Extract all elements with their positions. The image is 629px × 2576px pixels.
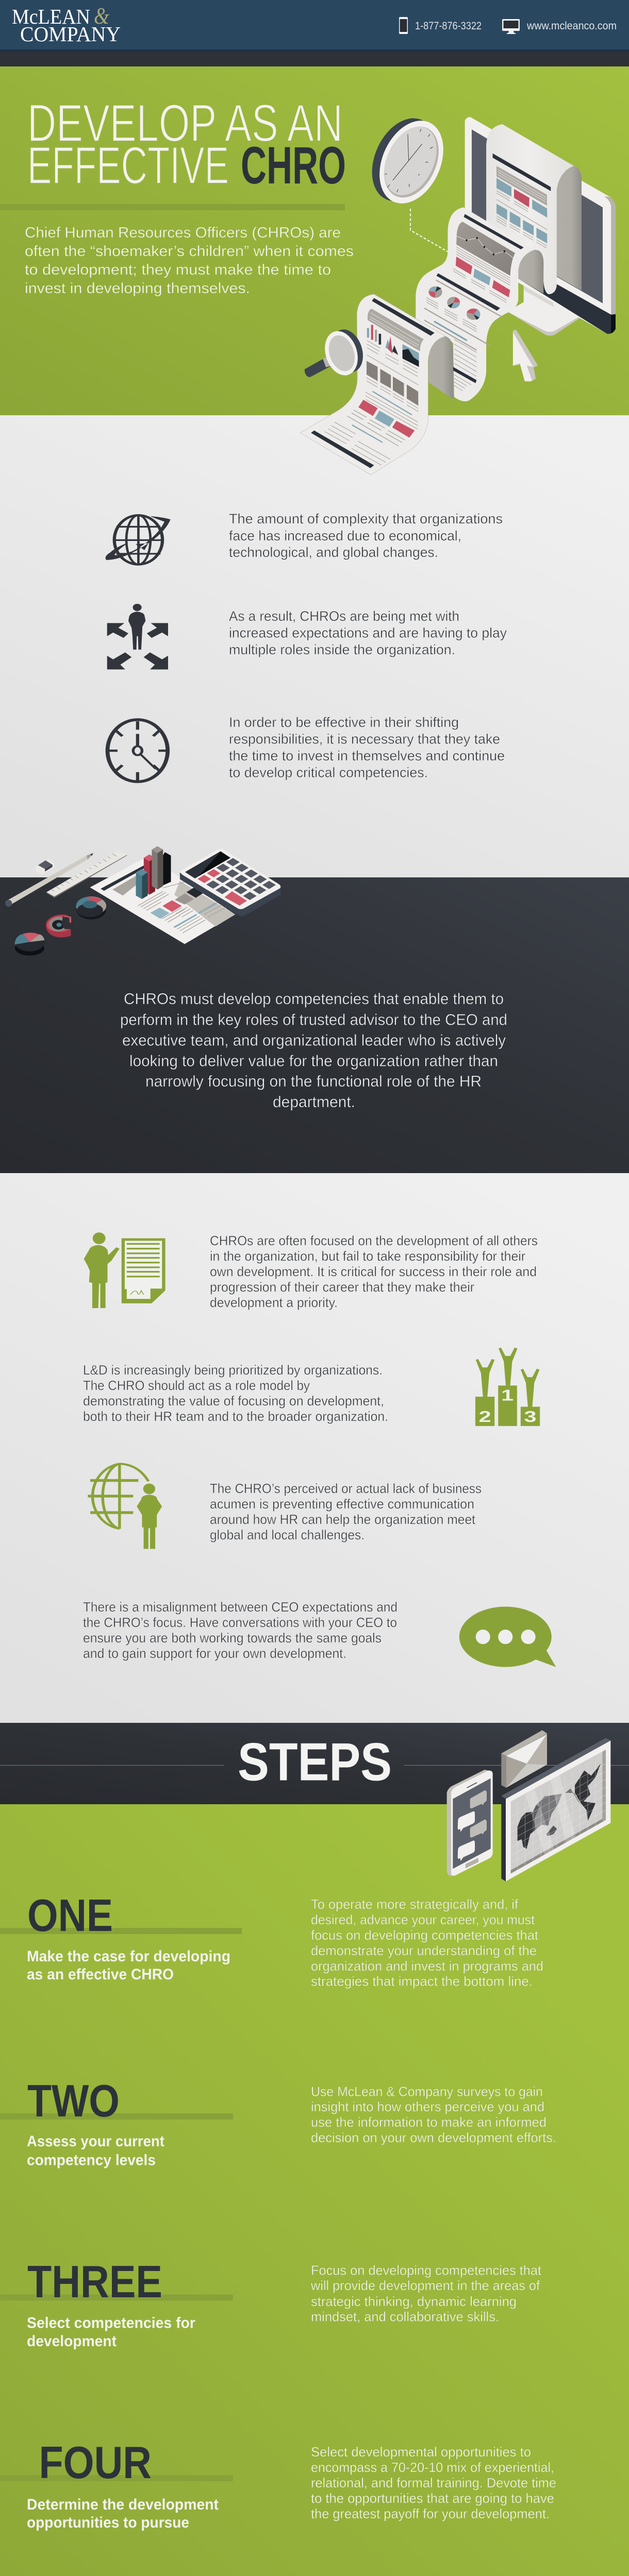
text: expectations [229, 608, 507, 657]
panel: steps banner [0, 1723, 629, 1804]
text: competencies statement: executive team, and organizational leader who is actively [122, 1031, 506, 1049]
step three description [310, 2263, 542, 2325]
text: investing time: to develop critical competencies. [229, 765, 428, 780]
text: own development: progression of their career that they make their [210, 1279, 474, 1295]
illustration: computer, scrolling report, clock, magnifier [300, 105, 616, 475]
step one heading [27, 1948, 230, 1983]
panel: challenges [83, 1232, 556, 1667]
illustration: desk with report, calculator, pencil and charts [5, 846, 281, 956]
panel: challenges background [0, 1173, 629, 1723]
step two description: decision on your own development efforts. [311, 2130, 556, 2145]
text: competencies statement: department. [273, 1093, 355, 1111]
title rule [0, 204, 345, 210]
text: CEO misalignment [83, 1599, 398, 1661]
framed world map [501, 1738, 610, 1882]
step two heading: competency levels [27, 2151, 156, 2169]
pie charts on page two [428, 286, 480, 320]
text: business acumen: around how HR can help the organization meet [210, 1512, 476, 1527]
text: own development: own development. It is critical for success in their role and [210, 1264, 537, 1279]
step four description: Select developmental opportunities to [311, 2444, 531, 2460]
paper sheet: page one curl [557, 166, 582, 291]
step three description: Focus on developing competencies that [311, 2263, 542, 2278]
title: CHRO [241, 136, 346, 195]
step one description: strategies that impact the bottom line. [311, 1973, 533, 1989]
step four heading: opportunities to pursue [27, 2514, 189, 2531]
icon: person with four arrows [107, 604, 168, 669]
text: investing time [229, 715, 505, 780]
step one [0, 1890, 543, 1989]
step two number: TWO [27, 2075, 120, 2126]
text: CEO misalignment: ensure you are both working towards the same goals [83, 1630, 382, 1646]
text: competencies statement: narrowly focusing on the functional role of the HR [145, 1072, 482, 1090]
step two rule [0, 2113, 233, 2120]
step four [0, 2437, 556, 2531]
icon: winners podium [475, 1348, 540, 1426]
text: investing time: responsibilities, it is necessary that they take [229, 732, 500, 747]
step one number: ONE [27, 1890, 113, 1941]
text: expectations: As a result, CHROs are being met with [229, 608, 459, 624]
intro paragraph [25, 225, 354, 297]
text: competencies statement: looking to deliver value for the organization rather than [129, 1052, 498, 1070]
panel: steps background [0, 1804, 629, 2576]
icon: winners podium: 1 [501, 1386, 514, 1404]
icon: winners podium: 3 [524, 1408, 537, 1425]
step four description [311, 2444, 556, 2521]
step three rule [0, 2295, 233, 2301]
text: L&D: L&D is increasingly being prioritized by organizations. [83, 1362, 383, 1378]
step three heading: Select competencies for [27, 2314, 195, 2332]
step four description: to the opportunities that are going to have [311, 2490, 554, 2506]
paper sheet: page three [300, 294, 445, 475]
text: CEO misalignment: There is a misalignment between CEO expectations and [83, 1599, 398, 1615]
text: complexity: The amount of complexity that organizations [229, 511, 503, 527]
ring chart [76, 896, 106, 920]
text: CEO misalignment: and to gain support for your own development. [83, 1646, 346, 1661]
panel: introduction background [0, 415, 629, 877]
logo: McLean & Company: & [94, 3, 109, 29]
step four heading: Determine the development [27, 2496, 219, 2513]
step one description: organization and invest in programs and [311, 1958, 543, 1974]
3D bar chart [136, 846, 171, 899]
pencil [5, 853, 93, 907]
icon: clock [108, 720, 168, 782]
text: expectations: increased expectations and are having to play [229, 625, 507, 641]
panel: hero background [0, 66, 629, 415]
text: complexity: technological, and global changes. [229, 545, 438, 560]
intro paragraph: often the “shoemaker’s children” when it comes [25, 243, 354, 260]
title: EFFECTIVE [27, 136, 229, 195]
step two description: Use McLean & Company surveys to gain [311, 2083, 543, 2099]
website address: www.mcleanco.com [526, 20, 617, 32]
text: L&D: The CHRO should act as a role model by [83, 1378, 310, 1393]
title [27, 94, 346, 195]
step three number: THREE [27, 2256, 162, 2307]
step three [0, 2256, 542, 2350]
heading: STEPS: STEPS [238, 1732, 392, 1792]
text: L&D: both to their HR team and to the broader organization. [83, 1409, 388, 1424]
step one description: To operate more strategically and, if [311, 1896, 519, 1912]
text: own development: in the organization, but fail to take responsibility for their [210, 1248, 525, 1264]
pie chart [14, 933, 45, 956]
text: competencies statement: CHROs must develop competencies that enable them to [124, 990, 504, 1008]
text: business acumen: acumen is preventing effective communication [210, 1496, 474, 1512]
step four rule [0, 2475, 233, 2481]
text: competencies statement [120, 990, 507, 1111]
step four heading [27, 2496, 219, 2531]
step one description: demonstrate your understanding of the [311, 1943, 537, 1958]
logo: McLean & Company: McLEAN [12, 5, 90, 28]
step two description: insight into how others perceive you and [311, 2099, 544, 2114]
report sheet [90, 856, 235, 944]
step four description: relational, and formal training. Devote time [311, 2475, 556, 2490]
step four number: FOUR [39, 2437, 152, 2488]
text: own development: CHROs are often focused on the development of all others [210, 1233, 538, 1248]
monitor stand [508, 281, 580, 335]
text: investing time: In order to be effective in their shifting [229, 715, 459, 730]
section: header bar [0, 0, 629, 66]
ruler [46, 850, 127, 898]
icon: desktop monitor [502, 19, 520, 34]
icon: speech bubble [459, 1607, 556, 1667]
magnifying glass [305, 324, 369, 381]
smartphone [447, 1770, 493, 1876]
icon: woman with globe [88, 1464, 162, 1549]
illustration: phone, envelope and world map [447, 1730, 610, 1882]
half ring chart [46, 914, 71, 937]
panel: dark competencies background [0, 877, 629, 1173]
step two [0, 2075, 556, 2169]
step three description: will provide development in the areas of [310, 2278, 540, 2293]
step two heading [27, 2133, 164, 2169]
intro paragraph: invest in developing themselves. [25, 280, 250, 297]
text: business acumen: global and local challenges. [210, 1527, 365, 1543]
paper sheet: page two [416, 208, 534, 401]
text: business acumen [210, 1481, 482, 1543]
eraser [35, 859, 54, 874]
area chart on page three [385, 336, 419, 367]
intro paragraph: to development; they must make the time to [25, 262, 331, 278]
step three heading [27, 2314, 195, 2350]
calculator [180, 849, 281, 916]
text: expectations: multiple roles inside the organization. [229, 642, 455, 657]
text: CEO misalignment: the CHRO’s focus. Have conversations with your CEO to [83, 1615, 397, 1630]
step three heading: development [27, 2333, 117, 2350]
logo: McLean & Company: COMPANY [20, 22, 121, 46]
step four description: encompass a 70-20-10 mix of experiential, [311, 2460, 554, 2475]
phone number: 1-877-876-3322 [415, 20, 482, 32]
text: investing time: the time to invest in themselves and continue [229, 748, 505, 764]
step two heading: Assess your current [27, 2133, 164, 2150]
step one rule [0, 1928, 242, 1934]
panel: why CHROs must develop [106, 511, 507, 782]
mouse cursor [513, 330, 538, 382]
text: own development [210, 1233, 538, 1310]
text: own development: development a priority. [210, 1295, 338, 1310]
text: L&D [83, 1362, 388, 1424]
step one heading: as an effective CHRO [27, 1966, 174, 1983]
text: L&D: demonstrating the value of focusing on development, [83, 1393, 384, 1409]
icon: mobile phone [399, 17, 408, 34]
step three description: mindset, and collaborative skills. [311, 2309, 499, 2325]
bar chart on page three [367, 325, 381, 345]
paper sheet: fold behind page two [518, 250, 543, 294]
paper sheet: page one [486, 124, 574, 294]
text: competencies statement: perform in the key roles of trusted advisor to the CEO and [120, 1011, 507, 1028]
intro paragraph: Chief Human Resources Officers (CHROs) are [25, 225, 341, 241]
step four description: the greatest payoff for your development. [311, 2506, 550, 2521]
envelope [501, 1730, 548, 1788]
icon: winners podium: 2 [478, 1408, 491, 1425]
step two description [311, 2083, 556, 2145]
wall clock [359, 105, 456, 217]
monitor [465, 117, 616, 334]
text: complexity [229, 511, 503, 560]
icon: woman presenting signed document [84, 1232, 165, 1308]
icon: globe with orbit arrow [106, 515, 171, 565]
logo: McLean & Company [12, 3, 121, 46]
dotted connector line [410, 209, 448, 252]
text: complexity: face has increased due to economical, [229, 528, 461, 544]
title: DEVELOP AS AN [27, 94, 343, 152]
step one description: desired, advance your career, you must [311, 1912, 535, 1927]
text: business acumen: The CHRO’s perceived or actual lack of business [210, 1481, 482, 1496]
step three description: strategic thinking, dynamic learning [311, 2294, 517, 2309]
step two description: use the information to make an informed [311, 2114, 547, 2130]
paper sheet: fold behind page three [428, 336, 453, 399]
step one description [311, 1896, 543, 1989]
step one heading: Make the case for developing [27, 1948, 230, 1965]
step one description: focus on developing competencies that [311, 1927, 539, 1943]
